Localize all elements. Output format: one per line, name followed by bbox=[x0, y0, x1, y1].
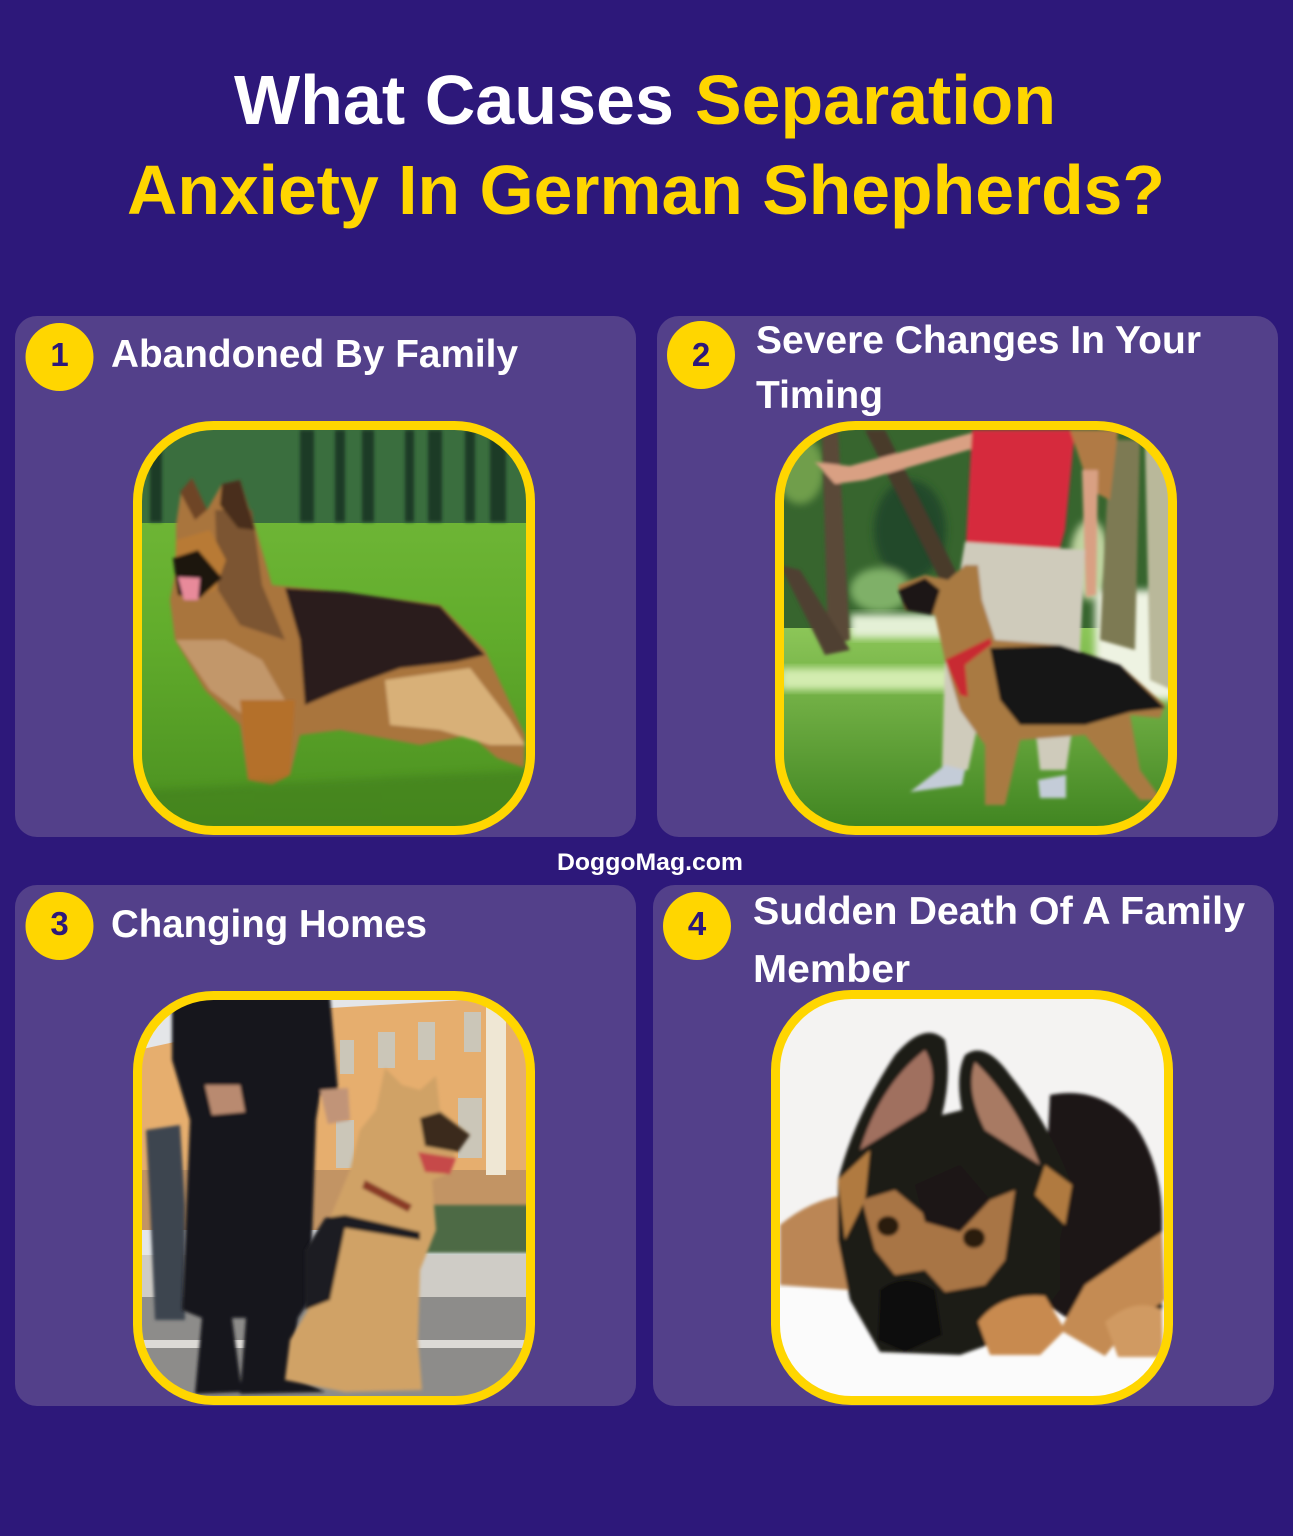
heading: Abandoned By Family: Abandoned By Family bbox=[111, 333, 518, 376]
heading: Severe Changes In Your Timing: Timing bbox=[756, 374, 883, 417]
panel: 4 Sudden Death Of A Family Member bbox=[653, 885, 1274, 1406]
watermark: DoggoMag.com: DoggoMag.com bbox=[557, 849, 743, 876]
title bbox=[127, 61, 1165, 229]
heading: Changing Homes: Changing Homes bbox=[111, 903, 427, 946]
number badge 3: 3 bbox=[50, 905, 69, 942]
number badge 4 bbox=[663, 892, 731, 960]
heading: Severe Changes In Your Timing bbox=[756, 319, 1201, 417]
title: Separation bbox=[695, 61, 1056, 139]
heading: Sudden Death Of A Family Member bbox=[753, 890, 1245, 991]
number badge 3 bbox=[26, 892, 94, 960]
photo: woman training a young shepherd in a park bbox=[776, 426, 1175, 831]
photo: German shepherd standing on grass bbox=[138, 426, 530, 831]
number badge 1: 1 bbox=[50, 336, 69, 373]
number badge 2: 2 bbox=[692, 336, 710, 373]
heading: Sudden Death Of A Family Member: Member bbox=[753, 948, 910, 991]
number badge 2 bbox=[667, 321, 735, 389]
panel: 1 Abandoned By Family bbox=[15, 316, 636, 837]
heading: Sudden Death Of A Family Member: Sudden Death Of A Family bbox=[753, 890, 1245, 933]
panel: 2 Severe Changes In Your Timing bbox=[657, 316, 1278, 837]
panel: 3 Changing Homes bbox=[15, 885, 636, 1406]
number badge 1 bbox=[26, 323, 94, 391]
photo: puppy lying down on white bbox=[776, 994, 1168, 1400]
number badge 4: 4 bbox=[688, 905, 707, 942]
heading: Severe Changes In Your Timing: Severe Changes In Your bbox=[756, 319, 1201, 362]
title: Anxiety In German Shepherds? bbox=[127, 151, 1165, 229]
title: What Causes bbox=[234, 61, 674, 139]
photo: officer in black with a shepherd on a street bbox=[138, 996, 530, 1401]
